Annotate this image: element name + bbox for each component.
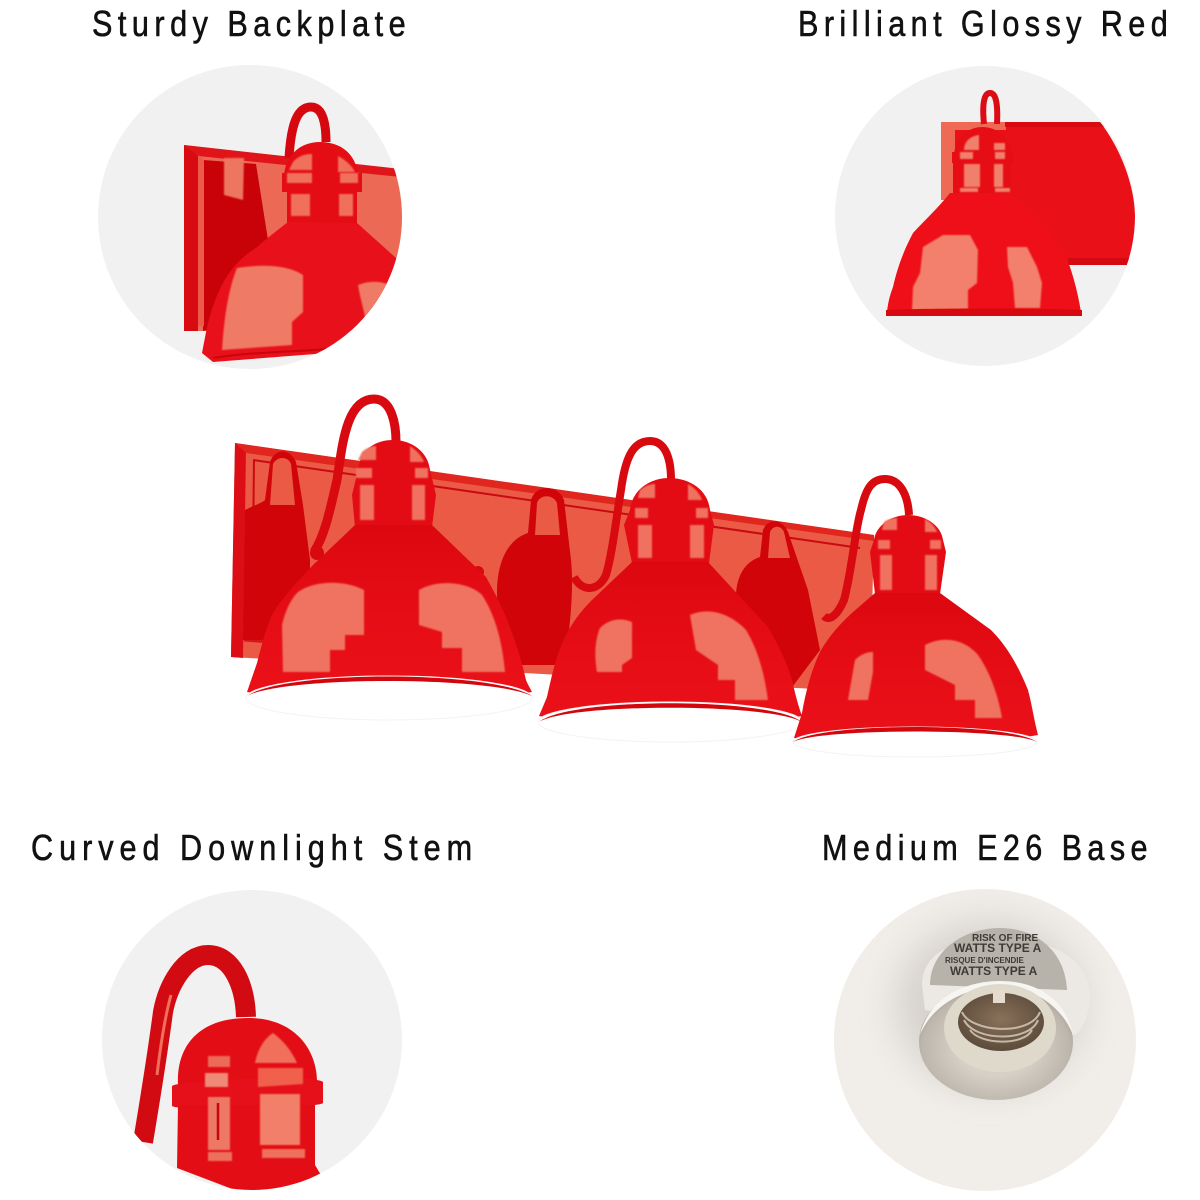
lamp 2 bbox=[538, 441, 802, 742]
socket collar with printed text: WATTS TYPE A bbox=[950, 964, 1038, 978]
panel: sturdy backplate detail bbox=[98, 65, 420, 369]
lamp 1 bbox=[246, 399, 532, 720]
ceramic ring bbox=[944, 984, 1056, 1072]
heading: Curved Downlight Stem: Curved Downlight Stem bbox=[31, 829, 472, 869]
heading: Brilliant Glossy Red: Brilliant Glossy Red bbox=[798, 5, 1168, 45]
soft shading around socket bbox=[895, 920, 1085, 1090]
backplate bbox=[231, 443, 874, 692]
lamp 3 bbox=[793, 479, 1038, 757]
contact tab bbox=[993, 993, 1005, 1003]
main product: three-light vanity fixture bbox=[231, 399, 1038, 757]
threaded hole bbox=[958, 993, 1044, 1051]
panel: medium E26 base detail bbox=[834, 889, 1136, 1191]
socket collar with printed text: WATTS TYPE A bbox=[954, 941, 1042, 955]
heading: Sturdy Backplate: Sturdy Backplate bbox=[92, 5, 406, 45]
socket cup bbox=[919, 984, 1073, 1100]
panel: curved downlight stem detail bbox=[102, 890, 402, 1195]
threads bbox=[962, 1012, 1040, 1042]
heading: Medium E26 Base: Medium E26 Base bbox=[822, 829, 1148, 869]
panel: brilliant glossy red detail bbox=[835, 66, 1135, 366]
plate shadows bbox=[243, 452, 820, 690]
socket collar with printed text: RISK OF FIRE bbox=[972, 933, 1038, 944]
socket collar with printed text: RISQUE D'INCENDIE bbox=[945, 956, 1024, 965]
icon: curved stem bbox=[143, 955, 246, 1142]
socket collar with printed text bbox=[922, 928, 1090, 1035]
